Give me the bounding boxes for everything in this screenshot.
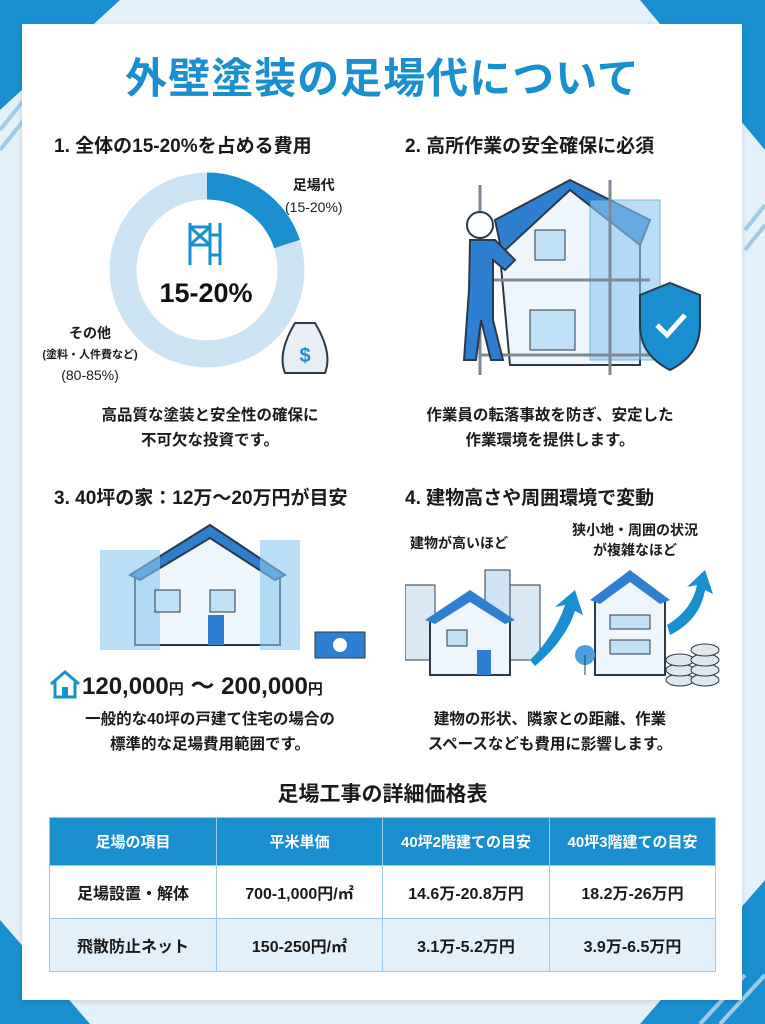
- table heading: 足場工事の詳細価格表: [278, 783, 488, 806]
- text: が複雑なほど: [593, 542, 677, 558]
- text 3: 一般的な40坪の戸建て住宅の場合の: [85, 711, 335, 728]
- price range: 120,000円 ～ 200,000円: [82, 673, 323, 700]
- sub labels 4: 建物が高いほど: [410, 535, 508, 551]
- price table: 3.9万-6.5万円: [584, 939, 681, 956]
- text 2: 作業員の転落事故を防ぎ、安定した: [426, 407, 674, 424]
- price table: 150-250円/㎡: [252, 939, 347, 956]
- price table: 40坪2階建ての目安: [401, 834, 531, 851]
- price table: 18.2万-26万円: [581, 886, 684, 903]
- illustration: worker on scaffold: [462, 178, 701, 375]
- text 2: 作業環境を提供します。: [466, 432, 634, 449]
- heading 2: 2. 高所作業の安全確保に必須: [405, 136, 654, 157]
- text 4: スペースなども費用に影響します。: [428, 736, 672, 753]
- title: 外壁塗装の足場代について: [125, 55, 640, 102]
- price table: 足場設置・解体: [77, 886, 189, 903]
- donut chart: $: [299, 345, 311, 367]
- text 4: 建物の形状、隣家との距離、作業: [434, 711, 666, 728]
- heading 1: 1. 全体の15-20%を占める費用: [54, 136, 312, 157]
- price table: 飛散防止ネット: [77, 939, 189, 956]
- text: (塗料・人件費など): [42, 349, 138, 361]
- text: その他: [69, 325, 111, 341]
- text: (80-85%): [61, 367, 119, 383]
- text 3: [85, 710, 335, 753]
- donut chart: [110, 172, 328, 374]
- text 1: [101, 406, 318, 449]
- price table: 40坪3階建ての目安: [567, 834, 698, 851]
- donut labels: [285, 177, 343, 215]
- donut labels: 足場代: [293, 177, 335, 193]
- price table: [49, 817, 716, 972]
- price table: 700-1,000円/㎡: [245, 886, 354, 903]
- donut labels: (15-20%): [285, 199, 343, 215]
- heading 3: 3. 40坪の家：12万～20万円が目安: [54, 488, 348, 509]
- text 1: 不可欠な投資です。: [141, 432, 279, 449]
- illustration: buildings and coins: [405, 570, 720, 686]
- illustration: house with scaffold: [100, 524, 366, 658]
- price table: 平米単価: [269, 834, 330, 851]
- price table: 3.1万-5.2万円: [417, 939, 515, 956]
- donut chart: 15-20%: [159, 278, 253, 308]
- price table: 足場の項目: [95, 834, 170, 851]
- text: 狭小地・周囲の状況: [572, 522, 698, 538]
- text 3: 標準的な足場費用範囲です。: [110, 736, 310, 753]
- price table: 14.6万-20.8万円: [408, 886, 524, 903]
- text 2: [426, 406, 674, 449]
- heading 4: 4. 建物高さや周囲環境で変動: [405, 488, 654, 509]
- text 1: 高品質な塗装と安全性の確保に: [101, 407, 318, 424]
- text 4: [428, 710, 672, 753]
